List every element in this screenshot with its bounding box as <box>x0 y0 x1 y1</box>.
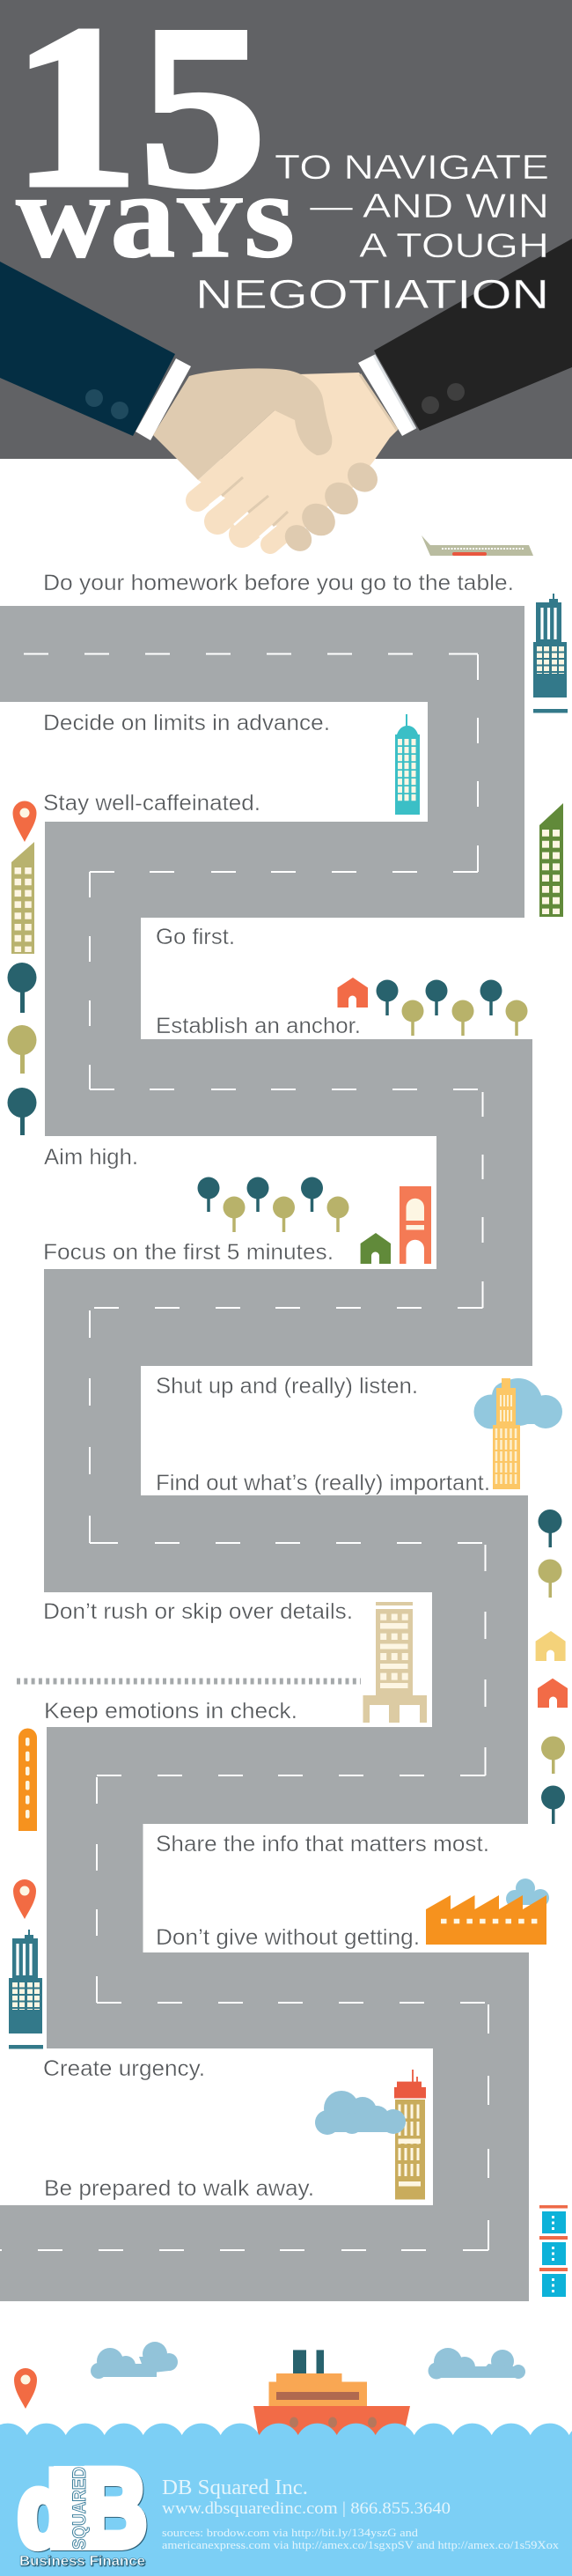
icon: right sleeve <box>358 239 572 436</box>
footer: website and phone: www.dbsquaredinc.com | 866.855.3640 <box>162 2499 451 2518</box>
text: urgency: Create urgency. <box>43 2056 205 2081</box>
text: limits: Decide on limits in advance. <box>43 711 330 735</box>
logo: dB Squared Business Finance: B <box>82 2447 147 2570</box>
icon: teal tower right <box>533 594 568 713</box>
icon: cloud right <box>428 2348 525 2380</box>
icon: cloud left <box>91 2342 178 2379</box>
icon: airplane <box>422 535 533 556</box>
icon: handshake <box>153 368 398 557</box>
icon: location pin bottom <box>14 2368 37 2409</box>
text: caffeinated: Stay well-caffeinated. <box>43 791 260 816</box>
text: details: Don’t rush or skip over details. <box>43 1599 353 1624</box>
icon: cyan building <box>395 714 420 815</box>
icon: left trees <box>7 963 37 1135</box>
icon: green house <box>361 1233 391 1264</box>
text: emotions: Keep emotions in check. <box>44 1699 297 1723</box>
text: go first: Go first. <box>156 925 235 949</box>
header background <box>0 0 572 459</box>
text: give without getting: Don’t give without getting. <box>156 1925 420 1950</box>
logo: dB Squared Business Finance <box>18 2447 147 2570</box>
dotted rail line <box>17 1679 361 1684</box>
text: important: Find out what’s (really) important. <box>156 1471 490 1495</box>
icon: khaki building <box>11 842 34 954</box>
text: share info: Share the info that matters most. <box>156 1832 489 1856</box>
logo: dB Squared Business Finance: Business Finance <box>19 2554 145 2569</box>
title: subtitle: A TOUGH <box>359 227 549 265</box>
text: aim high: Aim high. <box>44 1145 138 1170</box>
icon: beige building <box>363 1602 427 1723</box>
icon: orange tall building <box>18 1729 37 1831</box>
footer: sources: sources: brodow.com via http://bit.ly/134yszG and <box>162 2526 419 2539</box>
icon: cloud behind factory <box>506 1878 549 1908</box>
icon: green building <box>539 803 563 917</box>
icon: teal tower left <box>9 1930 43 2048</box>
icon: location pin top <box>12 801 37 842</box>
road <box>0 606 532 2301</box>
icon: cloud behind yellow tower <box>473 1378 562 1428</box>
icon: left sleeve <box>0 262 191 440</box>
icon: cloud by gold tower <box>315 2091 406 2135</box>
footer: sources: americanexpress.com via http://amex.co/1sgxpSV and http://amex.co/1s59Xox <box>162 2538 560 2551</box>
title: subtitle: TO NAVIGATE <box>275 149 549 187</box>
icon: yellow tower <box>493 1378 520 1489</box>
step texts <box>43 571 514 2201</box>
sea <box>0 2424 572 2576</box>
icon: location pin middle <box>13 1879 36 1919</box>
icon: factory <box>426 1895 546 1945</box>
icon: orange house <box>338 978 368 1008</box>
text: first 5 minutes: Focus on the first 5 minutes. <box>43 1240 334 1265</box>
logo: dB Squared Business Finance: SQUARED <box>70 2467 90 2550</box>
icon: right trees pair <box>539 1509 561 1598</box>
footer: company name: DB Squared Inc. <box>162 2476 308 2499</box>
title: subtitle: — AND WIN <box>310 188 549 225</box>
logo: dB Squared Business Finance: d <box>18 2453 70 2569</box>
icon: blue blocks <box>539 2205 568 2297</box>
title: subtitle <box>195 149 549 317</box>
text: walk away: Be prepared to walk away. <box>44 2176 314 2201</box>
footer: sources <box>162 2526 560 2551</box>
title: ways: waYs <box>16 148 295 283</box>
icon: tree row <box>377 979 528 1036</box>
title: subtitle: NEGOTIATION <box>195 271 549 317</box>
icon: ship <box>253 2350 410 2438</box>
text: listen: Shut up and (really) listen. <box>156 1374 418 1399</box>
icon: orange arch building <box>400 1186 431 1264</box>
icon: gold tower <box>394 2070 426 2200</box>
text: homework: Do your homework before you go to the table. <box>43 571 514 595</box>
icon: yellow house <box>536 1631 566 1661</box>
icon: orange house right <box>538 1679 568 1708</box>
road centre dashes <box>0 653 488 2250</box>
icon: trees right lower <box>541 1737 565 1824</box>
icon: tree row 2 <box>197 1177 348 1232</box>
text: anchor: Establish an anchor. <box>156 1014 361 1038</box>
